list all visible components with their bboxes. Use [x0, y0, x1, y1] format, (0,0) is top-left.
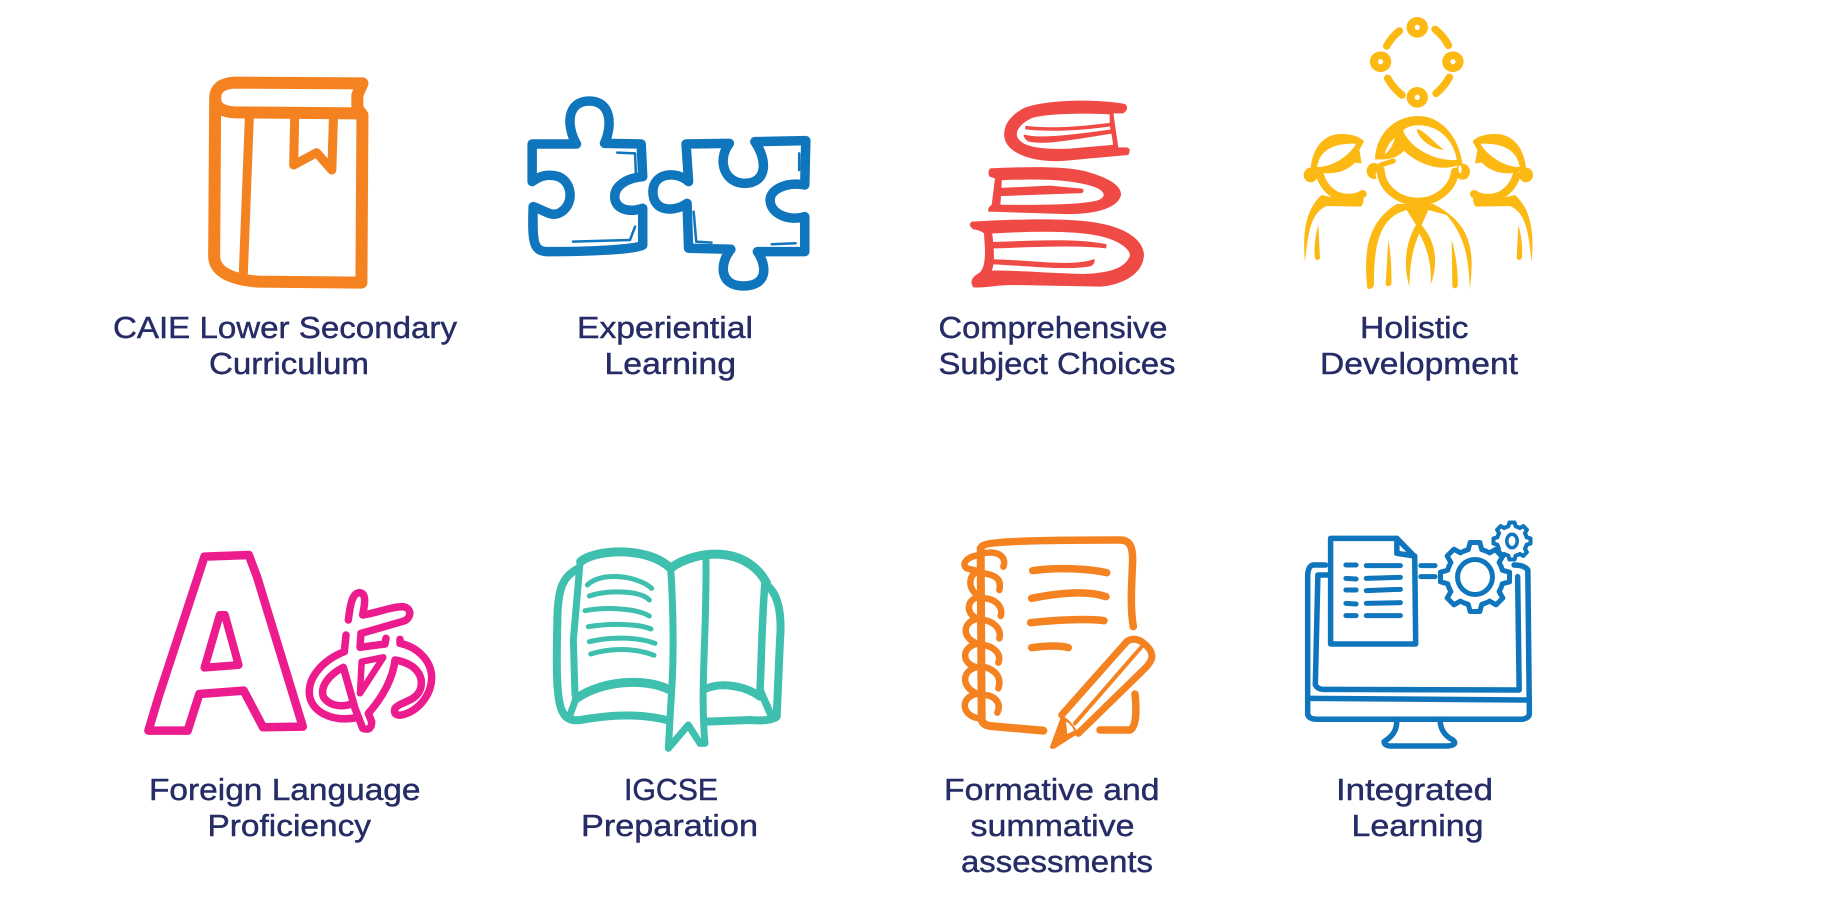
label: IGCSE Preparation: Preparation [581, 808, 758, 843]
label: CAIE Lower Secondary Curriculum [113, 310, 458, 381]
label: Comprehensive Subject Choices: Comprehensive [938, 310, 1168, 345]
icon: puzzle pieces [532, 101, 806, 286]
label: IGCSE Preparation [581, 772, 758, 843]
circle of dots above heads [1370, 17, 1464, 108]
panel: Experiential Learning [532, 101, 806, 381]
label: CAIE Lower Secondary Curriculum: Curriculum [209, 346, 369, 381]
small gear [1493, 522, 1531, 560]
middle book [988, 167, 1121, 214]
label: Integrated Learning: Learning [1352, 808, 1484, 843]
spiral binding [964, 553, 1004, 718]
label: Integrated Learning: Integrated [1336, 772, 1493, 807]
panel: IGCSE Preparation [557, 552, 781, 843]
label: Formative and summative assessments: assessments [961, 844, 1153, 879]
label: Comprehensive Subject Choices [938, 310, 1176, 381]
icon: spiral notebook and pencil [964, 540, 1152, 749]
label: Foreign Language Proficiency: Proficiency [208, 808, 372, 843]
pencil [1050, 639, 1152, 749]
people [1304, 116, 1533, 289]
foreign character [309, 593, 432, 729]
label: Comprehensive Subject Choices: Subject Choices [938, 346, 1176, 381]
letter A [148, 555, 303, 731]
top book [1004, 101, 1130, 161]
icon: letter A and foreign character [148, 555, 432, 731]
label: Foreign Language Proficiency [149, 772, 420, 843]
central person [1366, 116, 1472, 289]
icon: stack of books [970, 101, 1144, 288]
panel: Formative and summative assessments [944, 540, 1160, 879]
label: CAIE Lower Secondary Curriculum: CAIE Lower Secondary [113, 310, 458, 345]
label: Experiential Learning [577, 310, 753, 381]
panel: Comprehensive Subject Choices [938, 101, 1176, 381]
icon: group of people with circle [1304, 17, 1533, 289]
label: Holistic Development [1320, 310, 1518, 381]
label: Formative and summative assessments [944, 772, 1160, 879]
writing lines [1031, 569, 1107, 648]
label: Formative and summative assessments: Formative and [944, 772, 1160, 807]
left person [1304, 134, 1364, 262]
panel: CAIE Lower Secondary Curriculum [113, 83, 458, 381]
icon: open book with ribbon [557, 552, 781, 748]
label: Experiential Learning: Learning [604, 346, 736, 381]
icon: computer with document and gears [1308, 522, 1531, 746]
panel: Foreign Language Proficiency [148, 555, 432, 843]
large gear [1440, 542, 1510, 612]
bottom book [970, 219, 1144, 288]
panel: Holistic Development [1304, 17, 1533, 381]
label: Formative and summative assessments: summative [970, 808, 1134, 843]
label: Holistic Development: Development [1320, 346, 1518, 381]
panel: Integrated Learning [1308, 522, 1531, 843]
label: Experiential Learning: Experiential [577, 310, 753, 345]
right person [1473, 134, 1533, 262]
label: IGCSE Preparation: IGCSE [624, 772, 718, 807]
label: Holistic Development: Holistic [1360, 310, 1468, 345]
icon: orange book [214, 83, 362, 283]
computer monitor and document [1308, 538, 1529, 746]
label: Foreign Language Proficiency: Foreign Language [149, 772, 420, 807]
label: Integrated Learning [1336, 772, 1493, 843]
